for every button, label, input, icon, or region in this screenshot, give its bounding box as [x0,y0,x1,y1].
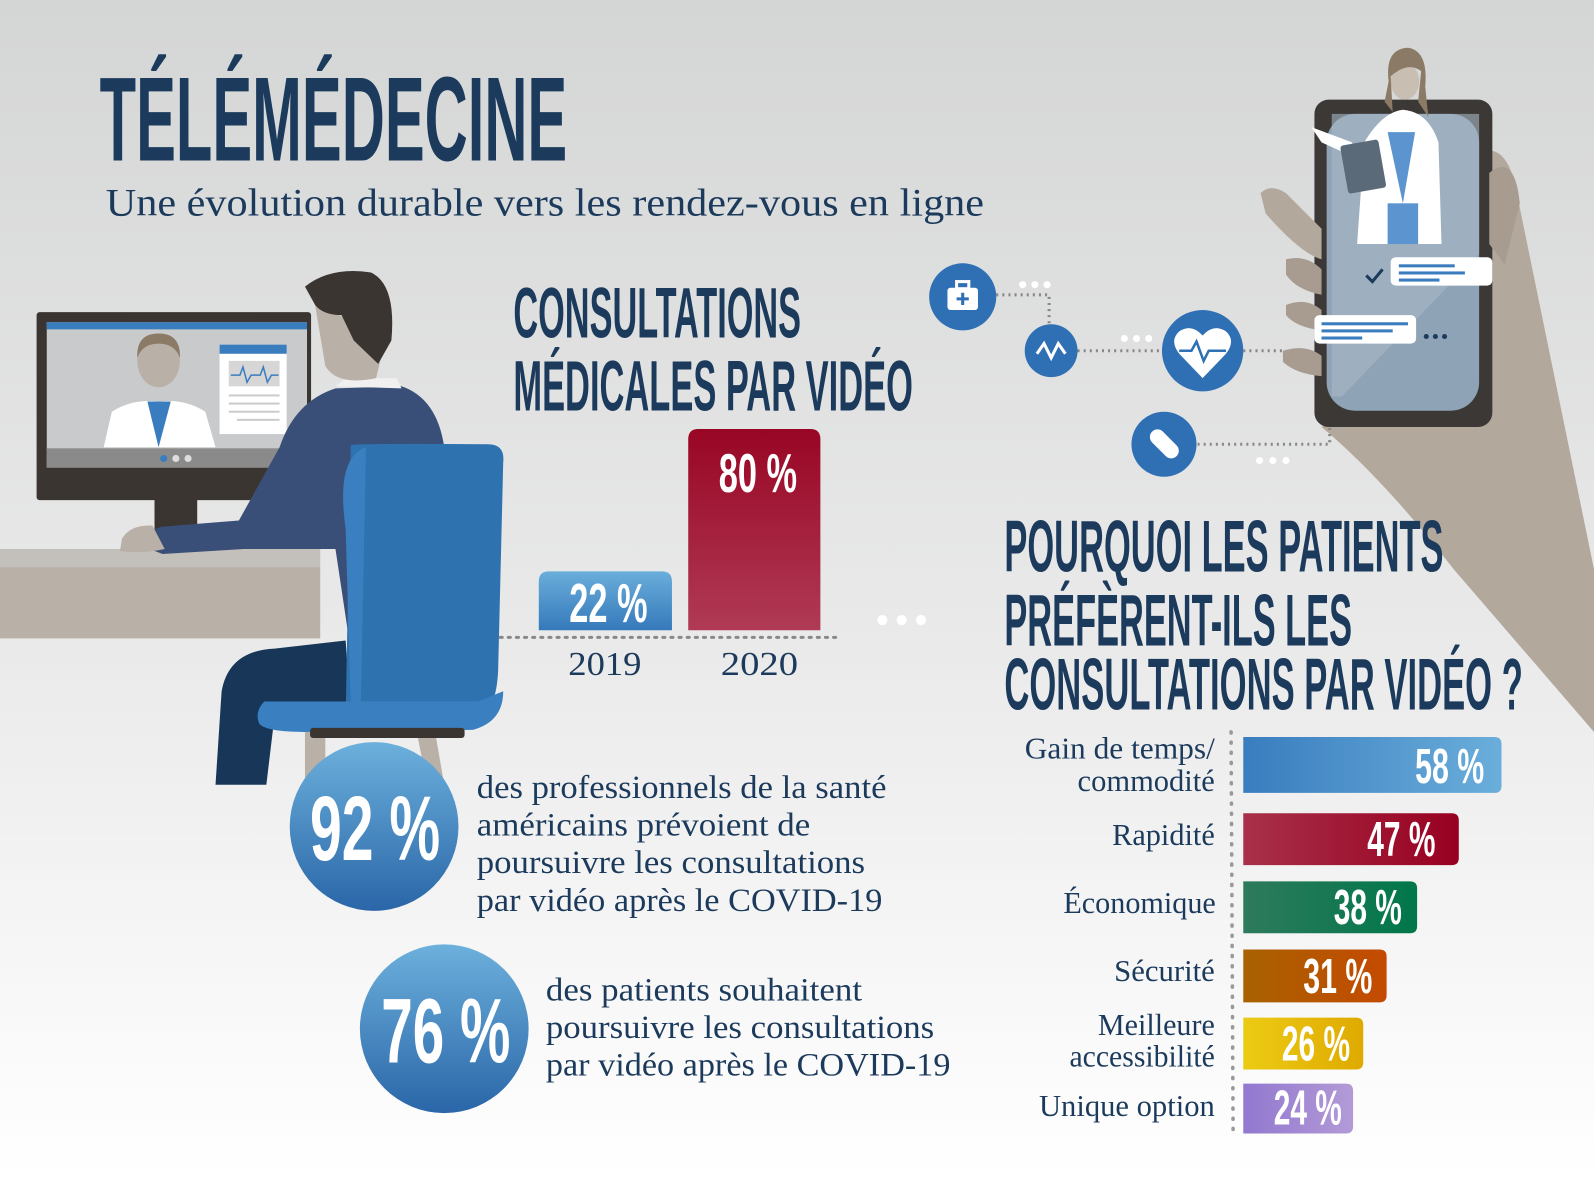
icons: medical circles with connectors [929,263,1330,477]
heading: consultations par vidéo: CONSULTATIONS [513,275,801,354]
bar chart: reasons: commodité [1078,764,1215,798]
stat: 76%: 76 % [381,980,510,1082]
bar chart: reasons: Économique [1063,886,1216,920]
bar chart: reasons [1025,731,1501,1135]
bar chart: reasons: Rapidité [1112,818,1215,852]
stat: 92%: américains prévoient de [477,808,810,844]
illustration: desk and monitor [0,312,320,638]
bar chart: 2019 vs 2020: 22 % [569,572,648,634]
stat: 92%: des professionnels de la santé [477,770,886,806]
stat: 76% [360,944,951,1113]
text: TÉLÉMÉDECINE [100,53,567,187]
stat: 76%: poursuivre les consultations [546,1010,934,1046]
stat: 92%: 92 % [310,778,440,880]
bar chart: reasons: 38 % [1334,881,1402,935]
stat: 92%: poursuivre les consultations [477,845,865,881]
stat: 76%: des patients souhaitent [546,972,862,1008]
heading: pourquoi les patients [1004,505,1523,726]
bar chart: reasons: 47 % [1367,813,1435,867]
stat: 92%: par vidéo après le COVID-19 [477,883,882,919]
bar chart: reasons: Gain de temps/ [1025,731,1215,765]
bar chart: reasons: accessibilité [1069,1039,1215,1073]
bar chart: reasons: 26 % [1282,1017,1350,1071]
bar chart: 2019 vs 2020: 2019 [568,646,641,683]
bar chart: reasons: 58 % [1415,740,1484,794]
bar chart: reasons: Meilleure [1098,1008,1215,1042]
bar chart: 2019 vs 2020: 2020 [721,646,798,683]
stat: 76%: par vidéo après le COVID-19 [546,1048,951,1084]
bar chart: 2019 vs 2020 [500,429,926,683]
bar chart: reasons: 31 % [1303,950,1372,1004]
illustration: hand holding phone [1261,48,1594,732]
bar chart: 2019 vs 2020: 80 % [719,442,797,504]
subtitle: Une évolution durable vers les rendez-vous en ligne [106,183,984,225]
stat: 92% [290,742,886,919]
text: MÉDICALES PAR VIDÉO [513,348,913,427]
illustration: seated man and chair [120,271,503,785]
bar chart: reasons: Unique option [1039,1089,1215,1123]
heading: consultations par vidéo [513,275,913,427]
bar chart: reasons: 24 % [1274,1081,1342,1135]
bar chart: reasons: Sécurité [1114,954,1215,988]
